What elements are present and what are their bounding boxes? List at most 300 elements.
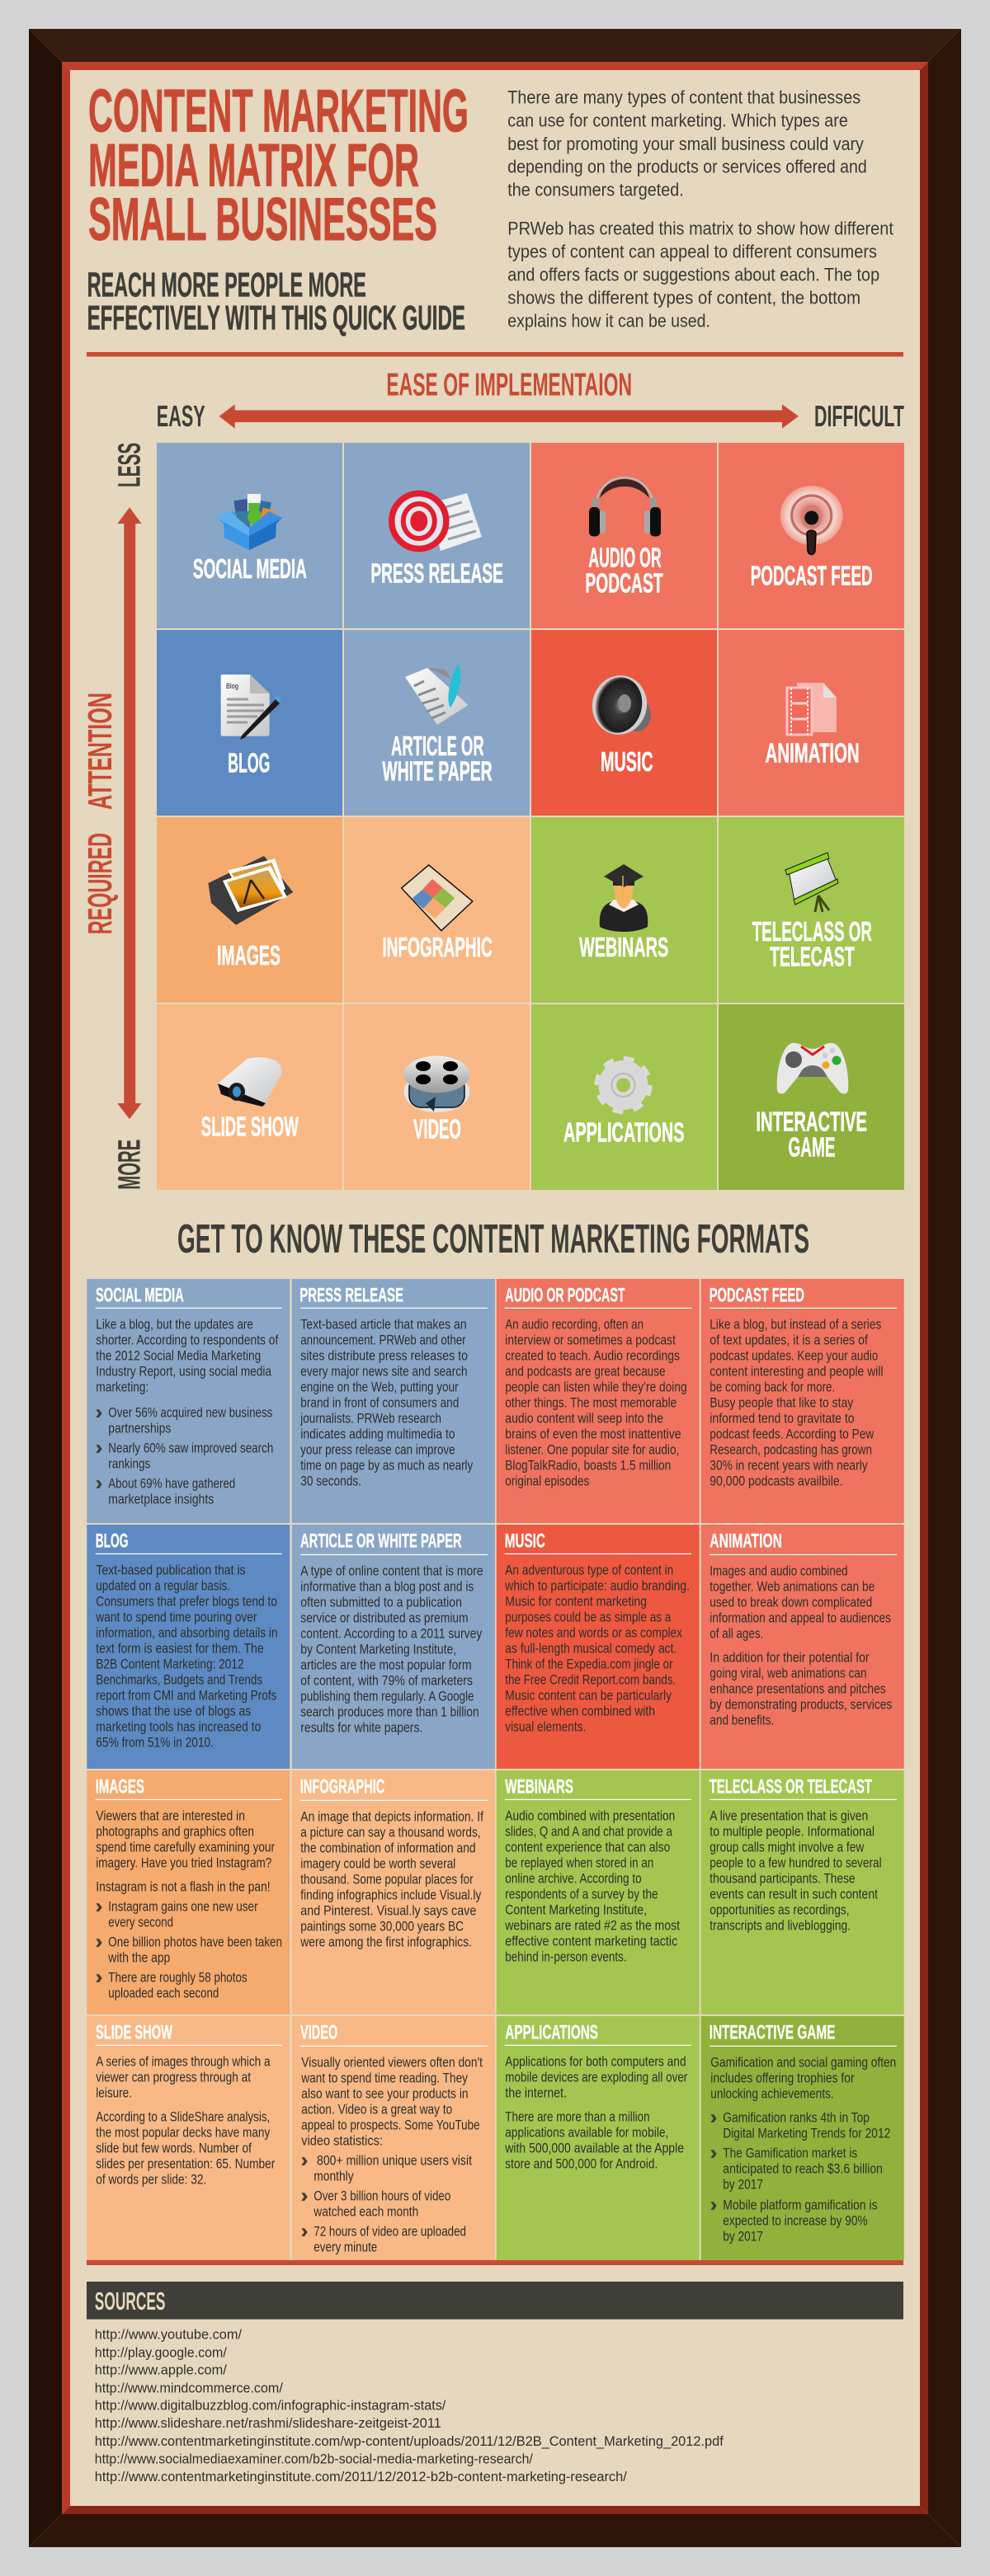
card body: your press release can improve xyxy=(300,1442,455,1458)
card body: people to a few hundred to several xyxy=(710,1855,882,1871)
card body: also want to see your products in xyxy=(301,2086,469,2102)
card heading: ARTICLE OR WHITE PAPER xyxy=(300,1530,462,1553)
matrix: podcast feed xyxy=(719,443,904,628)
label: SOCIAL MEDIA xyxy=(193,553,307,584)
sources list: http://www.mindcommerce.com/ xyxy=(95,2381,283,2395)
icon: headphones xyxy=(589,477,661,536)
sources list xyxy=(95,2328,724,2484)
required attention axis: ATTENTION xyxy=(81,693,119,810)
card body: shows that the use of blogs as xyxy=(96,1704,251,1719)
card heading: SLIDE SHOW xyxy=(96,2022,172,2044)
sources list: http://www.contentmarketinginstitute.com/2011/12/2012-b2b-content-marketing-research/ xyxy=(95,2470,627,2484)
card body: of content, with 79% of marketers xyxy=(300,1673,473,1689)
label: ARTICLE OR xyxy=(391,731,484,761)
card body: content experience that can also xyxy=(505,1840,670,1855)
intro text: explains how it can be used. xyxy=(507,310,710,331)
card: animation xyxy=(701,1525,904,1769)
card body: According to a SlideShare analysis, xyxy=(96,2109,270,2125)
card body: Like a blog, but the updates are xyxy=(96,1317,253,1333)
card body: effective when combined with xyxy=(505,1704,655,1719)
card body: marketplace insights xyxy=(108,1492,214,1507)
label: PODCAST xyxy=(585,568,663,599)
card body: podcast feeds. According to Pew xyxy=(710,1427,874,1442)
card body: 72 hours of video are uploaded xyxy=(314,2224,466,2240)
card body: Instagram gains one new user xyxy=(108,1899,258,1915)
card heading: WEBINARS xyxy=(505,1776,573,1798)
card body: created to teach. Audio recordings xyxy=(505,1348,680,1364)
card body: announcement. PRWeb and other xyxy=(300,1333,466,1348)
matrix: video xyxy=(344,1004,530,1190)
card body: which to participate: audio branding. xyxy=(504,1578,690,1594)
label: AUDIO OR xyxy=(588,542,662,572)
ease of implementation axis: EASY xyxy=(157,399,205,433)
card body: Digital Marketing Trends for 2012 xyxy=(723,2126,890,2141)
card heading: AUDIO OR PODCAST xyxy=(505,1284,625,1306)
card body: Gamification ranks 4th in Top xyxy=(723,2110,870,2126)
card heading: VIDEO xyxy=(300,2022,337,2044)
card body: Benchmarks, Budgets and Trends xyxy=(96,1672,262,1688)
card body: other things. The most memorable xyxy=(505,1395,676,1411)
card body: slide but few words. Number of xyxy=(96,2141,252,2156)
sources list: http://www.socialmediaexaminer.com/b2b-social-media-marketing-research/ xyxy=(95,2451,533,2466)
card body: Consumers that prefer blogs tend to xyxy=(96,1594,277,1610)
card body: Music content can be particularly xyxy=(505,1688,672,1704)
required attention axis: LESS xyxy=(112,443,147,487)
card body: leisure. xyxy=(96,2085,132,2101)
card body: Images and audio combined xyxy=(710,1563,848,1579)
label: TELECLASS OR xyxy=(752,916,872,947)
card body: respondents of a survey by the xyxy=(505,1887,658,1902)
card body: visual elements. xyxy=(505,1719,586,1735)
card body: webinars are rated #2 as the most xyxy=(504,1918,680,1934)
sources list: http://www.contentmarketinginstitute.com/wp-content/uploads/2011/12/B2B_Content_Marketing_2012.pdf xyxy=(95,2434,724,2449)
card body: updated on a regular basis. xyxy=(96,1578,230,1594)
card body: group calls might involve a few xyxy=(710,1840,865,1855)
card body: A series of images through which a xyxy=(96,2054,271,2070)
label: MUSIC xyxy=(601,746,653,777)
card body: 65% from 51% in 2010. xyxy=(96,1735,214,1751)
sources heading xyxy=(87,2282,903,2320)
card body: thousand. Some popular places for xyxy=(300,1872,474,1887)
card body: want to spend time pouring over xyxy=(95,1610,257,1625)
matrix: webinars xyxy=(531,817,717,1003)
matrix: animation xyxy=(719,630,904,816)
card body: content interesting and people will xyxy=(710,1364,884,1380)
card body: of text updates, it is a series of xyxy=(710,1333,868,1348)
card heading: ANIMATION xyxy=(710,1530,782,1553)
sources list: http://www.slideshare.net/rashmi/slideshare-zeitgeist-2011 xyxy=(95,2416,441,2431)
card body: opportunities as recordings, xyxy=(710,1902,850,1918)
card body: every second xyxy=(108,1915,173,1930)
card body xyxy=(300,1317,474,1489)
card body: with 500,000 available at the Apple xyxy=(504,2141,684,2156)
card body: thousand participants. These xyxy=(710,1871,856,1887)
card body: a picture can say a thousand words, xyxy=(300,1825,481,1840)
card body: purposes could be as simple as a xyxy=(505,1610,672,1625)
icon: gear xyxy=(599,1060,648,1110)
subtitle: REACH MORE PEOPLE MORE xyxy=(87,266,366,304)
card body: of words per slide: 32. xyxy=(96,2172,206,2188)
card body: podcast updates. Keep your audio xyxy=(710,1348,878,1364)
icon: game controller xyxy=(777,1043,848,1093)
required attention axis: MORE xyxy=(112,1140,147,1190)
required attention axis xyxy=(81,443,147,1190)
label: PRESS RELEASE xyxy=(370,558,503,589)
card body: often submitted to a publication xyxy=(300,1595,462,1610)
label: PODCAST FEED xyxy=(751,561,873,591)
card body: applications available for mobile, xyxy=(505,2125,668,2141)
ease of implementation axis xyxy=(157,368,904,433)
required attention axis: REQUIRED xyxy=(81,833,119,934)
icon: film reel xyxy=(404,1055,470,1112)
intro text: types of content can appeal to different consumers xyxy=(507,241,877,262)
card body: Like a blog, but instead of a series xyxy=(710,1317,881,1333)
card heading: PODCAST FEED xyxy=(710,1284,804,1306)
label: INTERACTIVE xyxy=(756,1107,867,1137)
card body: online archive. According to xyxy=(505,1871,642,1887)
matrix: press release xyxy=(344,443,530,628)
card body: BlogTalkRadio, boasts 1.5 million xyxy=(505,1458,671,1474)
card body: marketing tools has increased to xyxy=(96,1719,261,1735)
card body: by 2017 xyxy=(723,2229,763,2245)
card body: 30 seconds. xyxy=(300,1474,361,1489)
card body: A type of online content that is more xyxy=(300,1563,483,1579)
label: WHITE PAPER xyxy=(382,756,493,787)
label: INFOGRAPHIC xyxy=(382,932,493,962)
card body: Busy people that like to stay xyxy=(710,1395,854,1411)
card body: interview or sometimes a podcast xyxy=(505,1333,676,1348)
card: applications xyxy=(497,2016,700,2260)
card body: transcripts and liveblogging. xyxy=(710,1918,851,1934)
card: video xyxy=(292,2016,495,2260)
card body: mobile devices are exploding all over xyxy=(505,2070,688,2085)
card: music xyxy=(497,1525,700,1769)
sources list: http://www.youtube.com/ xyxy=(95,2328,242,2343)
label xyxy=(756,1107,867,1163)
card body: Industry Report, using social media xyxy=(96,1364,271,1380)
matrix: article or white paper xyxy=(344,630,530,816)
card body: finding infographics include Visual.ly xyxy=(300,1887,482,1903)
card body: Over 56% acquired new business xyxy=(108,1405,272,1421)
icon: graduate xyxy=(600,864,648,932)
card body: spend time carefully examining your xyxy=(96,1840,275,1855)
card body: sites distribute press releases to xyxy=(300,1348,468,1364)
card body: people can listen while they’re doing xyxy=(505,1380,687,1395)
icon: mini infographic xyxy=(402,865,473,931)
card body: every major news site and search xyxy=(300,1364,468,1380)
card body: and podcasts are great because xyxy=(505,1364,666,1380)
label: IMAGES xyxy=(217,940,280,971)
card body: used to break down complicated xyxy=(710,1595,872,1610)
card body: the Free Credit Report.com bands. xyxy=(505,1672,676,1688)
card body xyxy=(504,1808,680,1965)
label: TELECAST xyxy=(770,942,855,972)
card body: brand in front of consumers and xyxy=(300,1395,459,1411)
card heading: SOCIAL MEDIA xyxy=(96,1284,184,1306)
card body xyxy=(96,1808,282,2001)
card body: brains of even the most inattentive xyxy=(505,1427,681,1442)
card body: be coming back for more. xyxy=(710,1380,835,1395)
card body: Audio combined with presentation xyxy=(505,1808,675,1824)
card body: 30% in recent years with nearly xyxy=(710,1458,868,1474)
card body: Nearly 60% saw improved search xyxy=(108,1441,273,1456)
card body xyxy=(96,1317,279,1507)
title: SMALL BUSINESSES xyxy=(88,185,437,253)
label: GAME xyxy=(789,1132,835,1163)
card body: appeal to prospects. Some YouTube xyxy=(301,2118,480,2133)
card body: of all ages. xyxy=(710,1626,763,1642)
card body: and benefits. xyxy=(710,1713,774,1728)
card heading: MUSIC xyxy=(505,1530,545,1553)
card body: There are roughly 58 photos xyxy=(108,1970,248,1986)
card body: text form is easiest for them. The xyxy=(96,1641,264,1657)
icon: podcast broadcast xyxy=(780,486,843,554)
icon: blog document xyxy=(221,675,281,740)
card heading: PRESS RELEASE xyxy=(299,1284,403,1306)
card body: About 69% have gathered xyxy=(108,1476,235,1492)
card body: photographs and graphics often xyxy=(96,1824,254,1840)
card body: imagery could be worth several xyxy=(300,1856,455,1872)
card body: slides per presentation: 65. Number xyxy=(96,2156,276,2172)
card body: An image that depicts information. If xyxy=(300,1809,483,1825)
card body: Think of the Expedia.com jingle or xyxy=(505,1657,673,1672)
ease of implementation axis: DIFFICULT xyxy=(814,399,904,433)
intro text: depending on the products or services offered and xyxy=(507,157,867,177)
label: BLOG xyxy=(228,748,270,778)
card body: Visually oriented viewers often don't xyxy=(301,2055,483,2071)
card body: unlocking achievements. xyxy=(710,2086,834,2102)
intro text: can use for content marketing. Which types are xyxy=(507,110,848,131)
card body: An audio recording, often an xyxy=(505,1317,644,1333)
matrix: blog xyxy=(157,630,342,816)
matrix: slide show xyxy=(157,1004,342,1190)
card body: partnerships xyxy=(108,1421,171,1436)
intro text: There are many types of content that businesses xyxy=(507,87,860,108)
card body xyxy=(710,1563,892,1728)
icon: photo folder xyxy=(208,856,293,925)
card body: Mobile platform gamification is xyxy=(723,2198,878,2213)
card body: time on page by as much as nearly xyxy=(300,1458,474,1474)
icon: projection screen xyxy=(785,853,838,912)
card body: anticipated to reach $3.6 billion xyxy=(723,2161,883,2177)
card body: slides, Q and A and chat provide a xyxy=(505,1824,672,1840)
card body: informed tend to gravitate to xyxy=(710,1411,855,1427)
intro text: best for promoting your small business could vary xyxy=(507,134,864,154)
card body: shorter. According to respondents of xyxy=(96,1333,279,1348)
card body xyxy=(710,1317,884,1489)
card body: going viral, web animations can xyxy=(710,1666,867,1681)
card heading: TELECLASS OR TELECAST xyxy=(710,1776,872,1798)
card body xyxy=(300,1563,483,1736)
card body: by 2017 xyxy=(723,2177,763,2193)
card body: every minute xyxy=(314,2240,377,2255)
card body: journalists. PRWeb research xyxy=(300,1411,441,1427)
label: VIDEO xyxy=(413,1114,461,1145)
icon: blog document: Blog xyxy=(226,682,238,690)
card body: Music for content marketing xyxy=(505,1594,647,1610)
card: slide show xyxy=(87,2016,290,2260)
card: article or white paper xyxy=(292,1525,495,1769)
card body: engine on the Web, putting your xyxy=(300,1380,459,1395)
card body: store and 500,000 for Android. xyxy=(505,2156,658,2172)
card: infographic xyxy=(292,1770,495,2014)
ease of implementation axis: EASE OF IMPLEMENTAION xyxy=(386,368,632,403)
card body: rankings xyxy=(108,1456,150,1472)
card body: together. Web animations can be xyxy=(710,1579,874,1595)
matrix: social media xyxy=(157,443,342,628)
card body: original episodes xyxy=(505,1474,589,1489)
label: WEBINARS xyxy=(579,932,668,962)
card body xyxy=(505,1317,687,1489)
card body: A live presentation that is given xyxy=(710,1808,868,1824)
card body: few notes and words or as complex xyxy=(505,1625,682,1641)
card body: 800+ million unique users visit xyxy=(317,2153,472,2169)
matrix: images xyxy=(157,817,342,1003)
label: APPLICATIONS xyxy=(563,1117,685,1148)
card body: Text-based publication that is xyxy=(96,1563,246,1578)
label xyxy=(752,916,872,972)
title: MEDIA MATRIX FOR xyxy=(88,130,419,199)
matrix: music xyxy=(531,630,717,816)
card body xyxy=(504,1563,690,1735)
card body: viewer can progress through at xyxy=(96,2070,251,2085)
card body: The Gamification market is xyxy=(723,2146,857,2161)
card body: events can result in such content xyxy=(710,1887,878,1902)
icon: social media box xyxy=(216,494,282,550)
title: CONTENT MARKETING xyxy=(88,77,469,145)
card body: In addition for their potential for xyxy=(710,1650,870,1666)
card heading: IMAGES xyxy=(96,1776,144,1798)
card body: the 2012 Social Media Marketing xyxy=(96,1348,261,1364)
card: webinars xyxy=(497,1770,700,2014)
card body xyxy=(96,2054,276,2188)
intro text: shows the different types of content, the bottom xyxy=(507,288,860,308)
card body: expected to increase by 90% xyxy=(723,2213,868,2229)
card body: by demonstrating products, services xyxy=(710,1697,892,1713)
card body: to multiple people. Informational xyxy=(710,1824,874,1840)
card body: watched each month xyxy=(313,2204,418,2220)
card: teleclass or telecast xyxy=(701,1770,904,2014)
matrix: teleclass or telecast xyxy=(719,817,904,1003)
card body: monthly xyxy=(314,2169,354,2184)
label xyxy=(585,542,663,599)
card body: includes offering trophies for xyxy=(710,2071,855,2086)
card body: results for white papers. xyxy=(300,1720,422,1736)
card body: There are more than a million xyxy=(505,2109,650,2125)
card body: informative than a blog post and is xyxy=(300,1579,474,1595)
matrix: infographic xyxy=(344,817,530,1003)
card body: content. According to a 2011 survey xyxy=(300,1626,483,1642)
card body: with the app xyxy=(107,1950,170,1966)
matrix: interactive game xyxy=(719,1004,904,1190)
card: podcast feed xyxy=(701,1279,904,1523)
card body: search produces more than 1 billion xyxy=(300,1704,479,1720)
card body xyxy=(504,2054,688,2172)
sources list: http://www.apple.com/ xyxy=(95,2363,227,2378)
card: audio or podcast xyxy=(497,1279,700,1523)
card heading: APPLICATIONS xyxy=(505,2022,598,2044)
label xyxy=(382,731,493,787)
intro text: the consumers targeted. xyxy=(507,180,684,200)
card body xyxy=(95,1563,278,1751)
sources heading: SOURCES xyxy=(95,2287,165,2315)
card heading: INTERACTIVE GAME xyxy=(710,2022,835,2044)
intro text: PRWeb has created this matrix to show how different xyxy=(507,219,893,239)
card body: Over 3 billion hours of video xyxy=(314,2188,450,2204)
card body: indicates adding multimedia to xyxy=(300,1427,455,1442)
card body xyxy=(710,2055,896,2245)
card body: effective content marketing tactic xyxy=(505,1934,678,1949)
sources list: http://www.digitalbuzzblog.com/infographic-instagram-stats/ xyxy=(95,2399,446,2414)
icon: speaker xyxy=(587,670,653,740)
card body: listener. One popular site for audio, xyxy=(505,1442,679,1458)
card body: by Content Marketing Institute, xyxy=(300,1642,456,1657)
card body: the most popular decks have many xyxy=(96,2125,271,2141)
card body: video statistics: xyxy=(301,2133,383,2149)
sources list: http://play.google.com/ xyxy=(95,2345,227,2360)
card body xyxy=(710,1808,882,1934)
card body: publishing them regularly. A Google xyxy=(300,1689,474,1704)
card body: information, and absorbing details in xyxy=(96,1625,278,1641)
card body: and Pinterest. Visual.ly says cave xyxy=(300,1903,476,1919)
card body: the internet. xyxy=(505,2085,567,2101)
title xyxy=(88,77,469,253)
icon: target and newspaper xyxy=(392,493,482,551)
card body: were among the first infographics. xyxy=(299,1934,472,1950)
icon: paper and quill xyxy=(405,665,469,725)
card body: the combination of information and xyxy=(300,1840,476,1856)
intro text xyxy=(507,87,893,331)
intro text: and offers facts or suggestions about each. The top xyxy=(507,264,879,284)
card: social media xyxy=(87,1279,290,1523)
matrix: applications xyxy=(531,1004,717,1190)
card body xyxy=(300,2055,483,2255)
card body: articles are the most popular form xyxy=(300,1657,472,1673)
card body: information and appeal to audiences xyxy=(710,1610,891,1626)
icon: projector xyxy=(218,1057,281,1107)
card body: Text-based article that makes an xyxy=(300,1317,467,1333)
card body: B2B Content Marketing: 2012 xyxy=(96,1657,244,1672)
card body xyxy=(299,1809,483,1950)
card body: 90,000 podcasts availbile. xyxy=(710,1474,843,1489)
card body: be replayed when stored in an xyxy=(505,1855,653,1871)
card body: An adventurous type of content in xyxy=(505,1563,673,1578)
card body: paintings some 30,000 years BC xyxy=(300,1919,464,1934)
card body: report from CMI and Marketing Profs xyxy=(96,1688,276,1704)
card body: One billion photos have been taken xyxy=(108,1934,282,1950)
card: press release xyxy=(292,1279,495,1523)
card body: action. Video is a great way to xyxy=(301,2102,452,2118)
card body: Research, podcasting has grown xyxy=(710,1442,872,1458)
card body: Viewers that are interested in xyxy=(96,1808,245,1824)
card body: Applications for both computers and xyxy=(505,2054,686,2070)
icon: film document xyxy=(787,683,837,735)
card body: marketing: xyxy=(96,1380,148,1395)
card body: behind in-person events. xyxy=(505,1949,627,1965)
card body: Instagram is not a flash in the pan! xyxy=(96,1878,271,1894)
subtitle xyxy=(87,266,465,336)
card body: service or distributed as premium xyxy=(300,1610,469,1626)
card: blog xyxy=(87,1525,290,1769)
card heading: BLOG xyxy=(96,1530,128,1553)
card body: Gamification and social gaming often xyxy=(710,2055,896,2071)
card body: audio content will seep into the xyxy=(505,1411,663,1427)
card body: enhance presentations and pitches xyxy=(710,1681,886,1697)
card heading: INFOGRAPHIC xyxy=(300,1776,384,1798)
label: ANIMATION xyxy=(766,738,860,769)
card: images xyxy=(87,1770,290,2014)
card body: Content Marketing Institute, xyxy=(505,1902,647,1918)
